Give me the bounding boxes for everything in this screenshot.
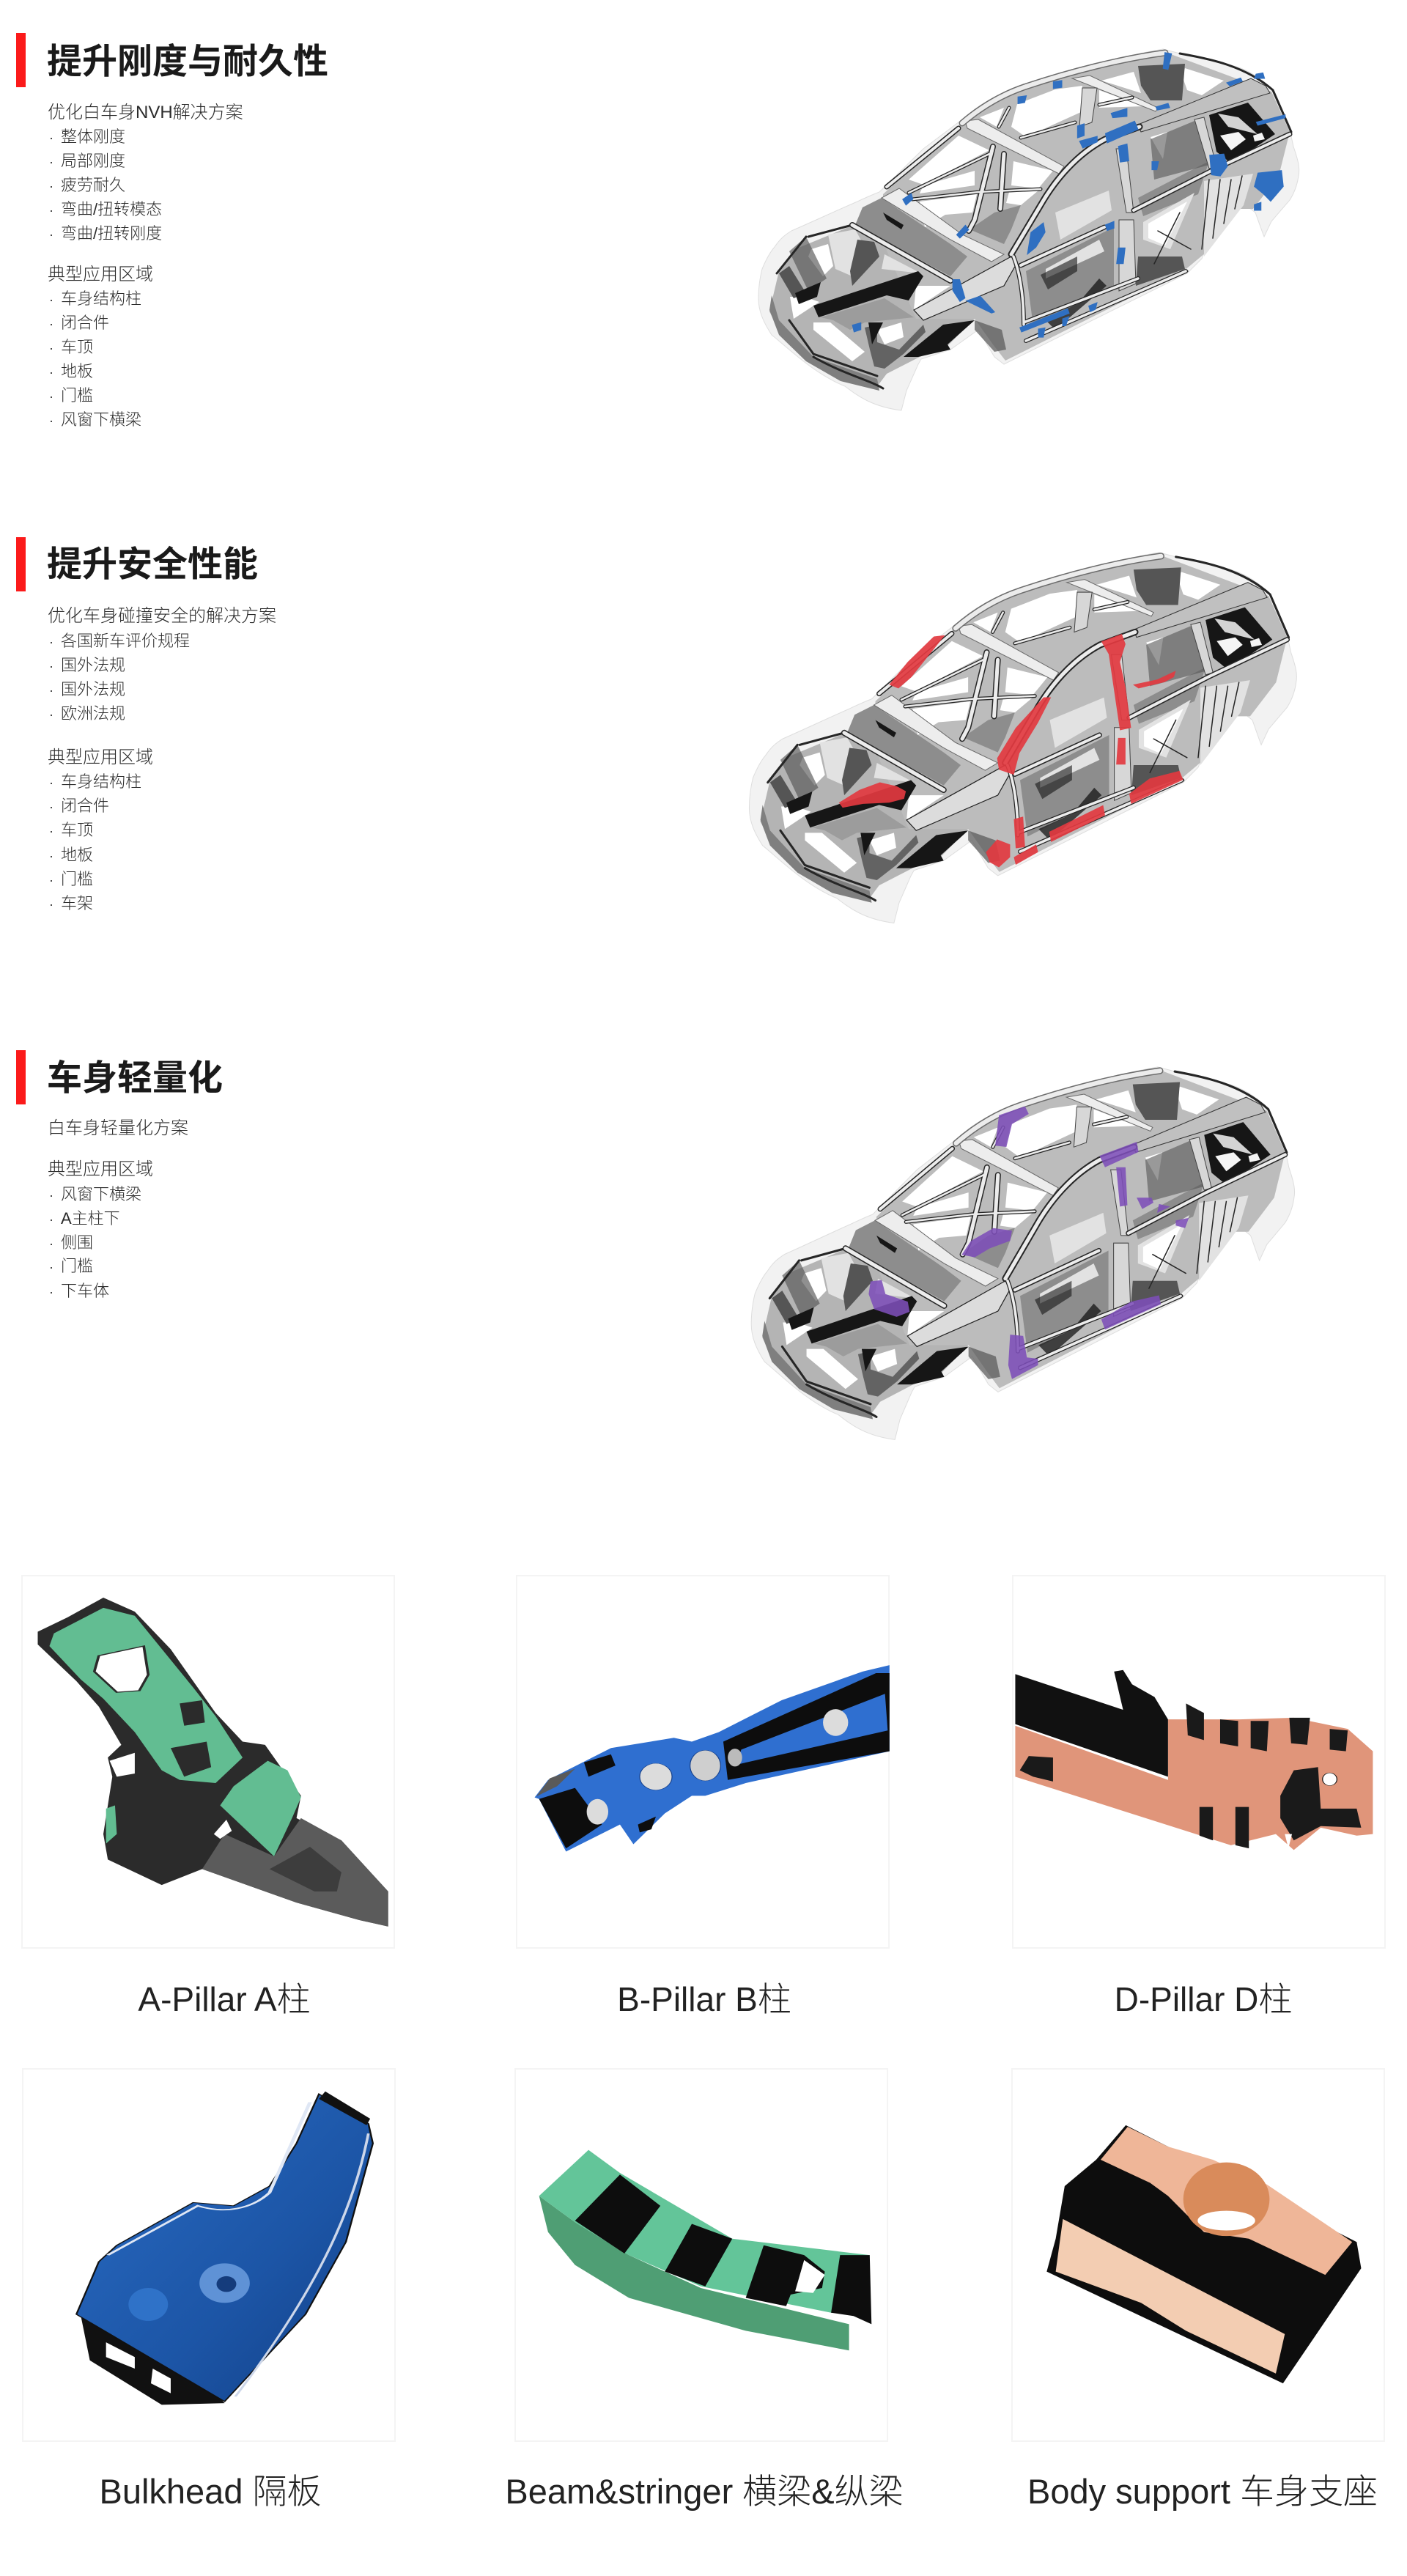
- red accent bar: [16, 33, 26, 87]
- text block: application areas: 闭合件: [61, 314, 109, 332]
- red accent bar: [16, 537, 26, 591]
- text block: solutions: 欧洲法规: [61, 704, 125, 723]
- part: A-Pillar: [37, 1598, 388, 1927]
- text block: solutions: 弯曲/扭转模态: [61, 200, 162, 218]
- text block: solutions: 优化白车身NVH解决方案: [48, 103, 243, 122]
- text block: application areas: [48, 748, 153, 912]
- card: A-Pillar: [21, 1575, 395, 1949]
- part: D-Pillar: [1015, 1670, 1373, 1850]
- text block: application areas: [48, 265, 153, 429]
- heading: 车身轻量化: [47, 1059, 223, 1098]
- text block: application areas: ·: [49, 317, 53, 331]
- label: A-Pillar: A-Pillar A柱: [138, 1980, 311, 2018]
- text block: solutions: ·: [49, 155, 53, 169]
- heading: 提升安全性能: [47, 545, 258, 584]
- text block: application areas: ·: [49, 341, 53, 355]
- text block: solutions: ·: [49, 683, 53, 698]
- car body with red reinforcement: [749, 552, 1297, 923]
- text block: application areas: 门槛: [61, 386, 93, 405]
- blue reinforcement accents: [852, 52, 1285, 338]
- text block: application areas: 车身结构柱: [61, 289, 141, 308]
- text block: solutions: ·: [49, 659, 53, 673]
- text block: solutions: ·: [49, 707, 53, 722]
- text block: solutions: 国外法规: [61, 680, 125, 698]
- row 2 part images: [75, 2092, 1362, 2405]
- heading: 提升刚度与耐久性: [47, 43, 328, 81]
- text block: solutions: [48, 606, 276, 723]
- card: Body support: [1011, 2068, 1385, 2442]
- text block: application areas: 地板: [61, 846, 93, 864]
- text block: solutions: 整体刚度: [61, 128, 125, 146]
- text block: application areas: ·: [49, 897, 53, 912]
- part: Body support: [1046, 2125, 1361, 2383]
- car body with blue reinforcement: [758, 48, 1300, 410]
- text block: application areas: 风窗下横梁: [61, 1185, 141, 1203]
- text block: application areas: ·: [49, 824, 53, 838]
- panel: lightweighting: [16, 1050, 223, 1300]
- text block: application areas: 风窗下横梁: [61, 410, 141, 429]
- card: Bulkhead: [22, 2068, 396, 2442]
- text block: solutions: ·: [49, 179, 53, 193]
- text block: application areas: ·: [49, 365, 53, 380]
- card: Beam and stringer: [514, 2068, 888, 2442]
- text block: application areas: ·: [49, 775, 53, 790]
- text block: application areas: ·: [49, 389, 53, 404]
- purple reinforcement accents: [868, 1107, 1189, 1379]
- text block: application areas: ·: [49, 1188, 53, 1203]
- text block: application areas: 门槛: [61, 870, 93, 888]
- red accent bar: [16, 1050, 26, 1104]
- text block: application areas: 车架: [61, 894, 93, 912]
- text block: solutions: 局部刚度: [61, 152, 125, 170]
- text block: application areas: ·: [49, 413, 53, 428]
- label: B-Pillar: B-Pillar B柱: [617, 1980, 791, 2018]
- text block: application areas: 门槛: [61, 1257, 93, 1275]
- text block: application areas: ·: [49, 800, 53, 814]
- text block: application areas: ·: [49, 292, 53, 307]
- label: Beam and stringer: Beam&stringer 横梁&纵梁: [505, 2472, 904, 2511]
- text block: solutions: ·: [49, 130, 53, 145]
- text block: solutions: 弯曲/扭转刚度: [61, 224, 162, 243]
- text block: application areas: ·: [49, 1236, 53, 1251]
- text block: application areas: 车顶: [61, 821, 93, 839]
- text block: solutions: ·: [49, 203, 53, 218]
- text block: application areas: 地板: [61, 362, 93, 380]
- text block: application areas: 典型应用区域: [48, 1159, 153, 1179]
- text block: application areas: 车身结构柱: [61, 772, 141, 791]
- text block: application areas: 典型应用区域: [48, 748, 153, 767]
- text block: solutions: 疲劳耐久: [61, 176, 125, 194]
- text block: solutions: 各国新车评价规程: [61, 632, 190, 650]
- text block: application areas: A主柱下: [61, 1209, 120, 1228]
- text block: solutions: 优化车身碰撞安全的解决方案: [48, 606, 276, 626]
- text block: application areas: [48, 1159, 153, 1300]
- text block: solutions: 国外法规: [61, 656, 125, 674]
- card: D-Pillar: [1012, 1575, 1386, 1949]
- card: B-Pillar: [516, 1575, 890, 1949]
- part: Beam and stringer: [539, 2150, 871, 2350]
- text block: application areas: ·: [49, 1260, 53, 1274]
- text block: solutions: ·: [49, 635, 53, 649]
- panel: stiffness and durability: [16, 33, 328, 429]
- label: Bulkhead: Bulkhead 隔板: [99, 2472, 322, 2511]
- label: Body support: Body support 车身支座: [1027, 2472, 1378, 2511]
- text block: solution: 白车身轻量化方案: [48, 1118, 188, 1138]
- panel: crash safety: [16, 537, 276, 912]
- car body with purple reinforcement: [750, 1067, 1295, 1440]
- text block: solutions: [48, 103, 243, 243]
- text block: solutions: ·: [49, 227, 53, 242]
- part: B-Pillar: [535, 1665, 890, 1852]
- text block: application areas: ·: [49, 1212, 53, 1227]
- text block: application areas: 典型应用区域: [48, 265, 153, 284]
- text block: application areas: 侧围: [61, 1233, 93, 1252]
- text block: application areas: ·: [49, 873, 53, 887]
- text block: application areas: ·: [49, 849, 53, 863]
- text block: application areas: 闭合件: [61, 797, 109, 815]
- text block: application areas: ·: [49, 1285, 53, 1299]
- part: Bulkhead: [76, 2092, 373, 2405]
- text block: application areas: 下车体: [61, 1282, 109, 1300]
- text block: application areas: 车顶: [61, 338, 93, 356]
- row 1 part images: [38, 1598, 1373, 1927]
- red reinforcement accents: [838, 634, 1183, 868]
- label: D-Pillar: D-Pillar D柱: [1115, 1980, 1292, 2018]
